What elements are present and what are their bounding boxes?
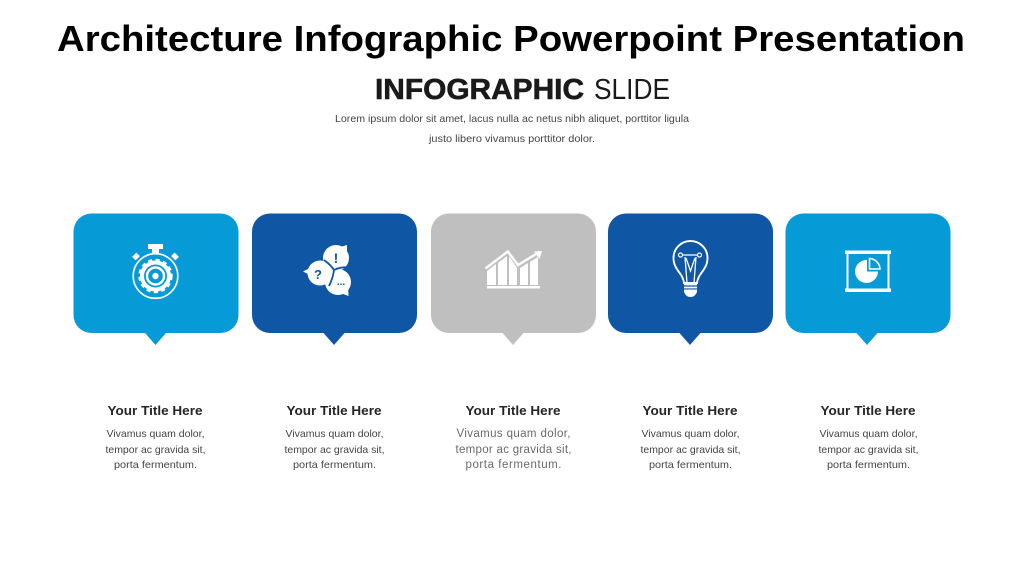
icon: presentation board with pie chart: [845, 250, 891, 292]
text block: column 2: Your Title Here: [286, 403, 382, 418]
callout shape 2: [252, 214, 417, 345]
panel: stopwatch card: [74, 214, 238, 345]
text block: column 1: [106, 403, 206, 471]
text block: column 5: porta fermentum.: [827, 459, 910, 471]
callout shape 3: [431, 214, 596, 345]
icon: light bulb: [674, 241, 708, 297]
text block: column 4: Your Title Here: [642, 403, 738, 418]
title: Architecture Infographic Powerpoint Presentation: [57, 18, 965, 59]
text block: column 2: tempor ac gravida sit,: [284, 444, 384, 456]
panel: growth chart card: [431, 214, 596, 345]
text block: column 4: Vivamus quam dolor,: [642, 428, 740, 440]
text block: column 3: tempor ac gravida sit,: [456, 444, 572, 456]
text block: column 3: Vivamus quam dolor,: [456, 428, 570, 440]
icon: bar chart with trend line: [486, 251, 542, 288]
text block: column 5: Your Title Here: [820, 403, 916, 418]
text block: column 1: Vivamus quam dolor,: [106, 428, 204, 440]
panel: light bulb card: [608, 214, 773, 345]
text block: column 1: porta fermentum.: [114, 459, 197, 471]
text block: column 3: [456, 403, 572, 471]
subtitle: INFOGRAPHIC: [375, 74, 584, 106]
text block: column 2: porta fermentum.: [293, 459, 376, 471]
icon: stopwatch gear: [132, 244, 179, 298]
text block: column 5: Vivamus quam dolor,: [820, 428, 918, 440]
text block: column 2: [284, 403, 384, 471]
callout shape 5: [786, 214, 950, 345]
callout shape 4: [608, 214, 773, 345]
text block: column 2: Vivamus quam dolor,: [286, 428, 384, 440]
text block: column 4: porta fermentum.: [649, 459, 732, 471]
intro text: [335, 113, 689, 145]
text block: column 5: tempor ac gravida sit,: [818, 444, 918, 456]
intro text: justo libero vivamus porttitor dolor.: [428, 133, 595, 145]
subtitle: [375, 74, 670, 106]
text block: column 4: [640, 403, 740, 471]
icon: three speech bubbles: [303, 245, 351, 296]
panel: speech bubbles card: [252, 214, 417, 345]
text block: column 1: Your Title Here: [108, 403, 202, 418]
icon: three speech bubbles: ...: [337, 277, 345, 288]
callout shape 1: [74, 214, 238, 345]
text block: column 3: porta fermentum.: [466, 459, 562, 471]
text block: column 4: tempor ac gravida sit,: [640, 444, 740, 456]
text block: column 1: tempor ac gravida sit,: [106, 444, 206, 456]
text block: column 3: Your Title Here: [466, 403, 560, 418]
panel: presentation card: [786, 214, 950, 345]
icon: three speech bubbles: !: [334, 250, 338, 266]
intro text: Lorem ipsum dolor sit amet, lacus nulla ac netus nibh aliquet, porttitor ligula: [335, 113, 689, 125]
text block: column 5: [818, 403, 918, 471]
subtitle: SLIDE: [594, 74, 670, 106]
icon: three speech bubbles: ?: [314, 267, 322, 282]
